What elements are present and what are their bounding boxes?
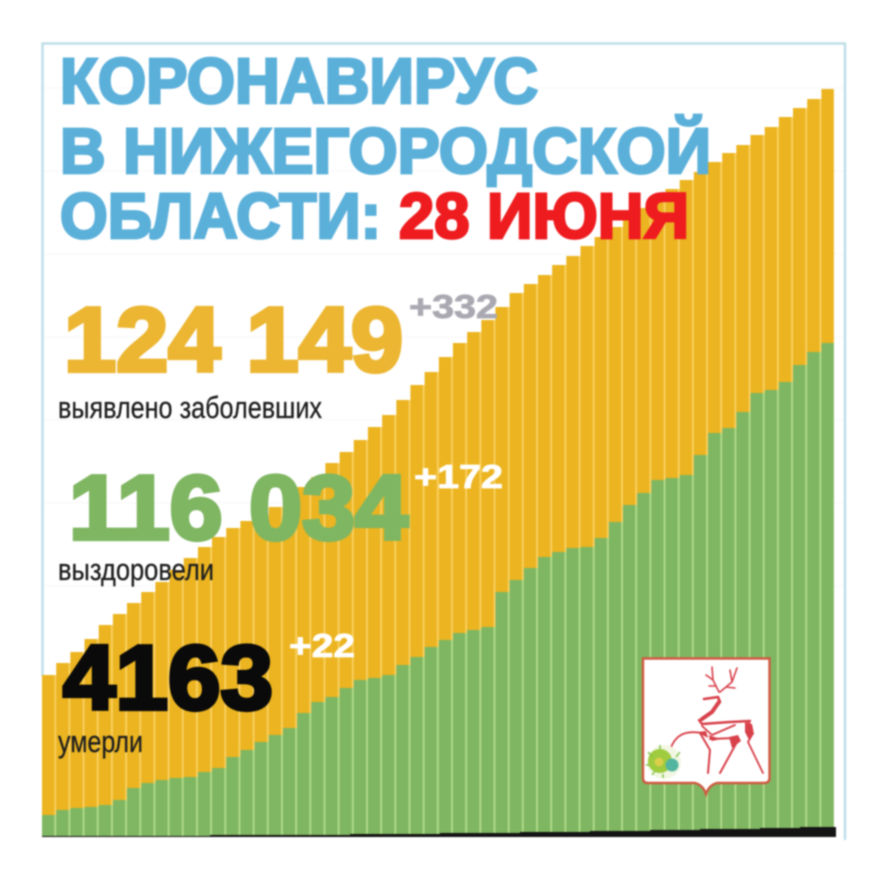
date: 28 ИЮНЯ <box>399 180 689 252</box>
stat: confirmed cases <box>58 288 498 425</box>
bars: confirmed cases <box>42 89 834 837</box>
deaths label: умерли <box>58 724 143 759</box>
recovered number: 116 034 <box>69 458 408 559</box>
icon: virus <box>646 745 681 779</box>
title line 2: В НИЖЕГОРОДСКОЙ <box>60 114 711 187</box>
deaths increment: +22 <box>289 627 355 664</box>
title line 3: ОБЛАСТИ: <box>60 180 381 252</box>
title <box>60 45 711 252</box>
recovered increment: +172 <box>414 458 503 495</box>
deer markings <box>697 722 754 748</box>
title line 1: КОРОНАВИРУС <box>60 45 538 117</box>
confirmed label: выявлено заболевших <box>58 390 322 425</box>
bars: recovered <box>42 343 834 837</box>
deaths number: 4163 <box>63 628 273 729</box>
stat: recovered <box>58 458 503 587</box>
recovered label: выздоровели <box>58 552 214 587</box>
shield <box>643 658 770 794</box>
stat: deaths <box>58 627 355 759</box>
deer <box>670 667 763 773</box>
confirmed number: 124 149 <box>64 290 403 391</box>
stacked bar chart <box>42 89 836 837</box>
confirmed increment: +332 <box>409 288 498 325</box>
icon: coat of arms <box>643 658 770 794</box>
bars: deaths <box>42 827 836 837</box>
